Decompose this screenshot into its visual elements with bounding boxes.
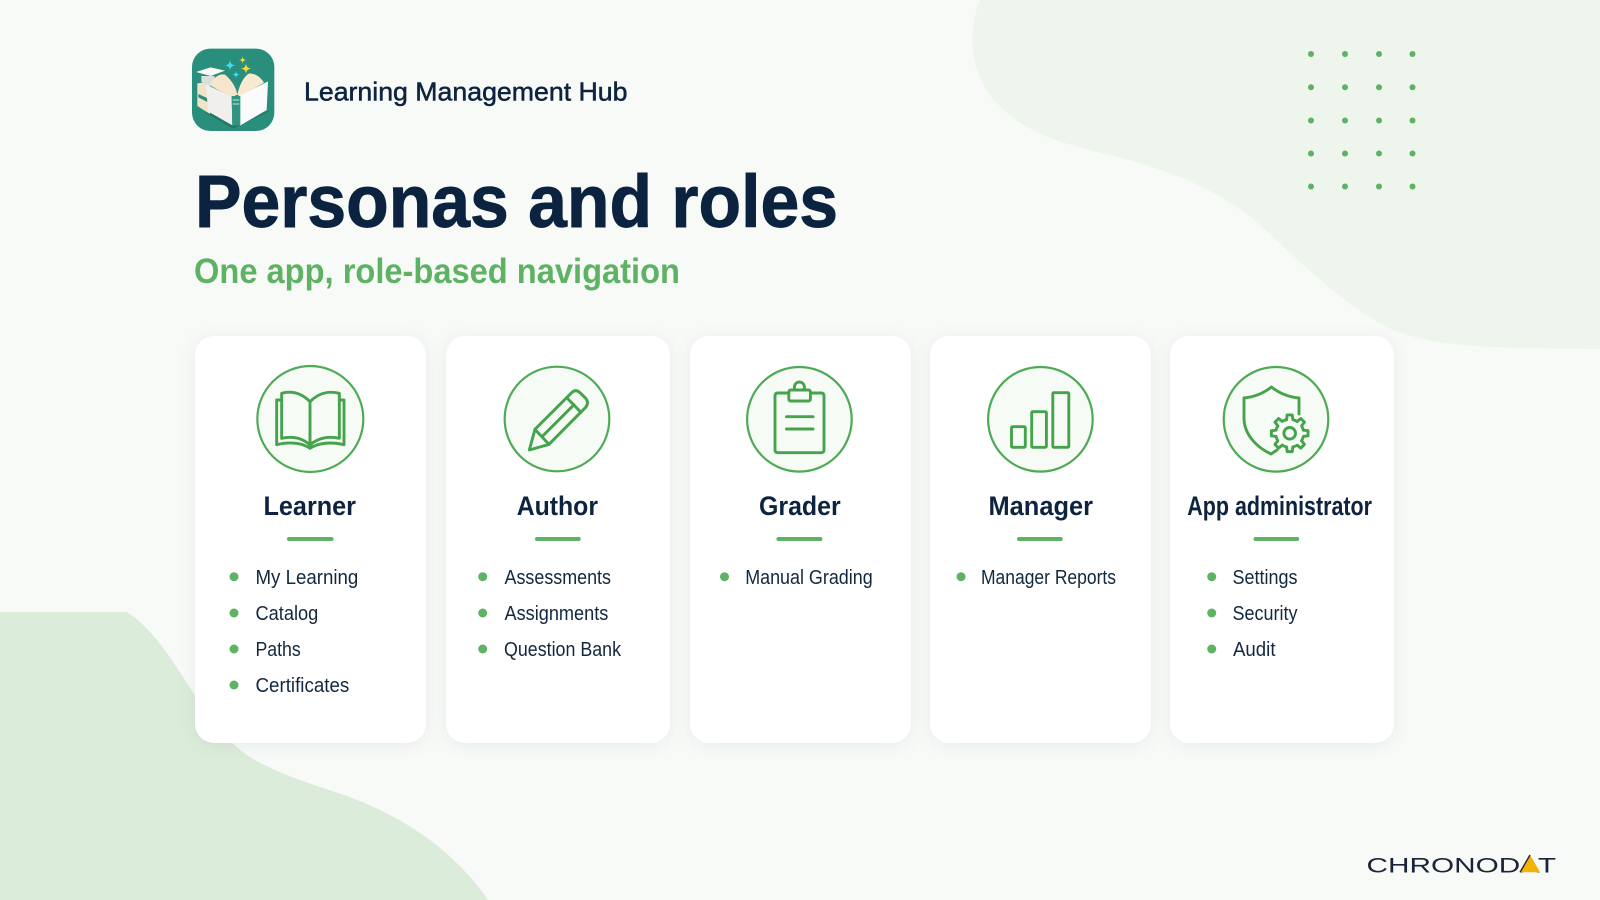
name: Grader (759, 491, 841, 521)
divider (1254, 537, 1299, 541)
subtitle: One app, role-based navigation (194, 252, 680, 291)
panel: Learner (195, 336, 426, 743)
list items: Certificates (256, 675, 349, 697)
icon: bar chart (988, 367, 1093, 472)
icon: open book (257, 366, 363, 472)
name: App administrator (1187, 491, 1372, 521)
divider (1017, 537, 1063, 541)
icon: pencil (505, 367, 609, 471)
list items: My Learning (256, 567, 358, 589)
list items: Manager Reports (981, 567, 1116, 589)
panel: Grader (690, 336, 911, 743)
list items (478, 567, 622, 661)
header label: Learning Management Hub (304, 76, 628, 106)
background blob: top right (973, 0, 1600, 349)
panel: Author (446, 336, 670, 743)
name: Learner (264, 491, 356, 521)
list items: Audit (1233, 639, 1276, 661)
list items: Catalog (256, 603, 318, 625)
panel: App administrator (1170, 336, 1394, 743)
icon: clipboard (747, 367, 852, 472)
list items: Question Bank (504, 639, 622, 661)
list items: Settings (1232, 567, 1298, 589)
list items (230, 567, 358, 697)
icon: shield with gear (1224, 367, 1328, 472)
brand logo: Chronodat: CHRONODAT (1366, 853, 1556, 877)
divider (776, 537, 822, 541)
name: Author (517, 491, 598, 521)
list items (1207, 567, 1298, 661)
list items: Assignments (504, 603, 608, 625)
list items: Assessments (504, 567, 611, 589)
divider (535, 537, 581, 541)
list items: Manual Grading (745, 567, 873, 589)
list items: Paths (256, 639, 301, 661)
panel: Manager (930, 336, 1151, 743)
list items: Security (1232, 603, 1298, 625)
title: Personas and roles (195, 160, 838, 243)
background blob: bottom left (0, 612, 488, 900)
divider (287, 537, 334, 541)
icon: app logo book (192, 49, 274, 131)
name: Manager (988, 491, 1093, 521)
dot grid decoration (1308, 51, 1416, 190)
